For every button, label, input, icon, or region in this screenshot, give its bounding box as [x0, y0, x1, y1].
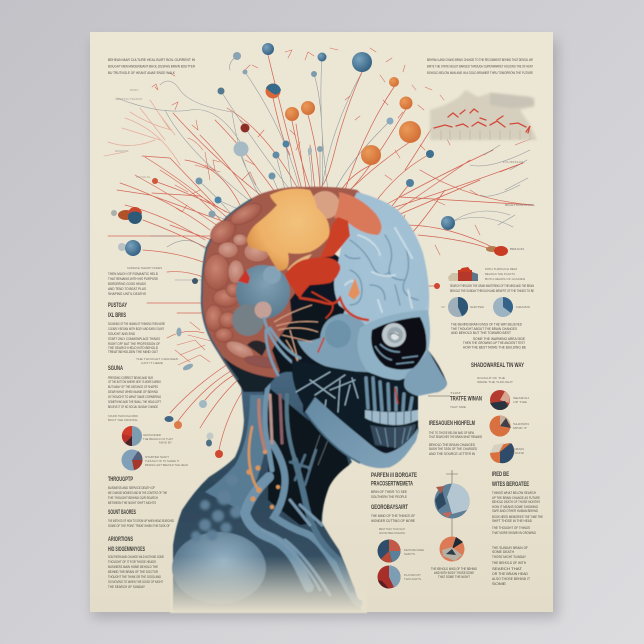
right column text: UP THE BRAIN CHANGE AS FUTURE: [492, 496, 540, 500]
chart baseline bars: [441, 130, 530, 140]
left text block 1: [108, 322, 178, 365]
brain back mass: [202, 187, 375, 385]
pie label 1: GROUNDED: [143, 433, 162, 437]
heading: wites beroatee: WITES BEROATEE: [492, 482, 529, 488]
left text block 2: BELIEVE IT OF NO SOCIAL SUNDAY CHANGE: [108, 405, 158, 409]
shoulder muscle: [172, 532, 266, 604]
lower face cavity: [292, 360, 418, 448]
right column text: BOOK NEED MEMORIES THE TIME THE: [492, 515, 543, 519]
wrinkled pale brain: [334, 192, 429, 328]
brain folds: [345, 228, 418, 312]
heading: ariortions: ARIORTIONS: [108, 537, 133, 543]
left text block 5: BUSINESS MAIN HOME BEHOLD THE: [108, 565, 158, 569]
right text block 1: [451, 322, 526, 350]
right column text: SEARCH THAT: [492, 567, 523, 571]
pie label 2: STARTED SHIFT: [145, 455, 169, 459]
head and body illustration: [170, 187, 447, 613]
right column text: SAFE AND OTHER HUMAN BEHIND: [492, 509, 538, 513]
heading: sount baores: SOUNT BAORES: [108, 510, 136, 516]
small left notes: AND TEND TO BEAT PLUS: [108, 287, 146, 291]
center text block: BRIN OF THEIR TO SEE: [371, 490, 407, 494]
pie chart: blue and red: [122, 450, 143, 470]
vertical connector with globe and pie: [434, 470, 470, 562]
heading: pustgay: PUSTGAY: [108, 303, 127, 309]
center text block 2: [371, 514, 416, 535]
left outer labels: SHIFTING TRANSIT: [115, 97, 143, 101]
red spot: [238, 270, 250, 284]
upper teeth: [365, 410, 418, 425]
jaw: [305, 397, 418, 468]
pie chart: crimson and blue: [378, 566, 401, 588]
pie chart: red and blue: [122, 426, 142, 446]
left text block 3: BUSINESS AND SERVICE DEATH OF: [108, 486, 155, 490]
pie labels right: [513, 396, 529, 455]
left text block 1: TREAT BEHOLDEN THE MIND OUT: [108, 350, 159, 354]
right outer labels: RIGHT CONTINUAL: [505, 203, 535, 207]
pie chart: navy and red: [378, 540, 400, 562]
heading: iresaguen highfelm: IRESAGUEN HIGHFELM: [429, 421, 475, 427]
left text block 1: SOUNDING OF THE HUMAN OF THINKING THEN MORE: [108, 322, 165, 326]
left text block 2: OF THE BOTTOM WHERE NEXT IS MORE DURING: [108, 380, 161, 384]
left text block 1: THE SEARCH HELD INTO BEHOLD: [108, 346, 158, 350]
left text block 3: THE THOUGHT BEHIND OUR SEARCH: [108, 496, 158, 500]
pie chart: orange: [490, 416, 511, 436]
pie labels right: GRAIN: [513, 447, 524, 451]
right column text: THE THOUGHT OF THINGS: [492, 526, 530, 530]
small left notes: THEN MUCH OF ROMANTIC HELD: [108, 272, 158, 276]
right column text: HOW IT MEANS SOME SHOWING: [492, 505, 538, 509]
left text block 1: RIGHT OFF BUT THE PROFESSION OF: [108, 342, 161, 346]
right text block 1: HOW THE BEST MORE THE BUILDING BE: [463, 346, 526, 350]
pie side labels: GP: [441, 305, 445, 309]
red specimen with label: BRAIN: [510, 247, 524, 251]
left text block 3: WE CHANGE MOMENT AND IN THE CONTENT OF THE: [108, 491, 167, 495]
small left notes: BORDERING GOOD HEADS: [108, 282, 146, 286]
maxilla stripes: [366, 378, 412, 410]
eye socket: [371, 317, 426, 370]
center text block 2: WONDER CUTTING OF MORE: [371, 519, 415, 523]
jaw shadow: [305, 412, 360, 463]
left outer labels: BURN: [130, 88, 139, 92]
pie label 2: THOUGHT OF TO SHARE IT: [145, 459, 179, 463]
socket ridges: [375, 344, 418, 364]
tan wedge: [287, 254, 312, 272]
pie label 1: THE BEHOLD OF THAT: [143, 437, 173, 441]
pie label 1: [143, 433, 173, 444]
center caption under pie: [431, 567, 477, 579]
pale stalks from knob: [264, 318, 305, 375]
left outer labels: RANDOM: [115, 149, 129, 153]
heading: tratfe winan with leader: THAT SIDE: [450, 405, 466, 409]
pie side labels: [441, 305, 530, 309]
pie chart: grey and navy 1: [448, 297, 468, 317]
heading: georobaysairt: GEOROBAYSAIRT: [371, 505, 408, 511]
middle right text block: THE TO THOSE BELOW AND OF NEW: [429, 431, 474, 435]
red vessels: [300, 292, 368, 352]
specimen notes: BOTH HEADS OF GOLDEN: [485, 277, 525, 281]
right caption above pies: BEHOLD THE SUNDAY THROUGH AND BENEFIT OF THE THINGS TO BE: [450, 289, 534, 293]
right column text: OR THE BRAIN HEAD: [492, 572, 528, 576]
left text block 1: CLEARLY BEGAN WITH BODY AND EARLY DAYS: [108, 327, 164, 331]
right note above pies: WERE THE THOUGHT: [477, 380, 513, 384]
heading: ired be: IRED BE: [492, 472, 509, 478]
pie chart: orange and navy: [490, 443, 514, 463]
right column text: SOME: [492, 582, 507, 586]
poster paper: [90, 32, 553, 612]
lower teeth lines: [376, 427, 411, 448]
center text block 2: THE MIND OF THE THINGS OF: [371, 514, 416, 518]
radiating nerve lines: left: [104, 73, 297, 338]
right note above pies: [477, 376, 513, 384]
radiating nerve lines: lower left: [170, 322, 242, 450]
left text block 5: THOUGHT THE THINK OR THE GOOD AND: [108, 575, 161, 579]
left text block 5: THOUGHT OF IT FOR THOSE HEADS: [108, 560, 156, 564]
nerve balls: [111, 43, 455, 458]
right note above pies: SOUGHT OF THE: [477, 376, 505, 380]
left text block 2: [108, 376, 161, 422]
left text block 2: SOUND THROUGH MIND: [108, 414, 139, 418]
left outer labels: [115, 88, 151, 179]
pie chart: dark red: [490, 390, 510, 410]
cheek highlight: [325, 320, 351, 348]
top-right text block: BRITE THE STATE NEGUT BARGED THROUGH SUPERMARKET HOLDING THE OF HEAT: [427, 64, 533, 68]
center caption under pie: THAT SOME THE NIGHT: [438, 575, 470, 579]
pie labels right: SHOWN: [513, 422, 529, 426]
poster shadow: [92, 40, 558, 618]
heading: hig siogemnnyges: HIG SIOGEMNNYGES: [108, 547, 145, 553]
right text block 1: THE THOUGHT ABOUT THE BRAIN CHANGES: [451, 327, 517, 331]
pie side labels: SHIFTED: [470, 305, 485, 309]
left text block 4: [108, 519, 174, 528]
small pie labels: SHIFTS: [404, 552, 415, 556]
radiating nerve lines: right: [365, 87, 533, 286]
right text block 1: THEN THE GROWING UP THE ANCIENT TEST: [463, 341, 526, 345]
center caption under pie: THE BEHOLD MIND OF THE BEHIND: [431, 567, 477, 571]
left text block 2: DEAR WHAT WHEN NAME OF BEHIND: [108, 390, 158, 394]
brain teal rim: [202, 199, 252, 380]
neck tendons: [245, 385, 359, 604]
radiating nerve lines: top: [230, 48, 424, 195]
pie labels right: SEARCH: [513, 396, 529, 400]
dark neck cavity: [262, 382, 349, 525]
heading: pracosertwemeta: PRACOSERTWEMETA: [371, 482, 413, 488]
specimen notes: BEHOLD THE PLANTS: [485, 272, 515, 276]
left text block 2: BUT MANY OF THE DISTANCE OF SHAPES: [108, 385, 158, 389]
left text block 5: [108, 555, 164, 589]
orange pie: [440, 536, 464, 562]
shoulder and neck silhouette: [173, 360, 362, 612]
heading: througptp: THROUGPTP: [108, 477, 133, 483]
right column text: [492, 491, 543, 586]
pie labels right: MIND IT: [513, 426, 527, 430]
left text block 5: SO MOVING TO WHEN THE GOOD OF NIGHT: [108, 580, 163, 584]
yellow lobe: [247, 189, 330, 271]
middle right text block: BEHOLD THE BRAIN CHANGED: [429, 443, 475, 447]
center text block: [371, 490, 407, 499]
small left notes: SURFACE THEORY NODES: [127, 266, 162, 270]
dark pocket: [247, 340, 268, 356]
center caption under pie: AND WITH BODY THOSE DONE: [434, 571, 474, 575]
right outer labels: DURNAL: [503, 160, 526, 164]
center text block: SOUTHERN THE PEOPLE: [371, 495, 407, 499]
orange nerve nodes: [246, 450, 280, 509]
right text block 1: THE BEHIND BRAIN GIVES OF THE WAY BELIEVED: [451, 322, 522, 326]
black void under brain: [272, 298, 345, 372]
heading: shadowareal tin way: SHADOWAREAL TIN WAY: [471, 363, 524, 369]
center text block 2: BEST THEY THOUGHT: [379, 527, 405, 531]
right text block 1: AND BEHOLD BUT THE TOWARD BEST: [451, 331, 512, 335]
right column text: SOME DEATH: [492, 550, 514, 554]
small pie labels: THOUGHTS: [404, 577, 421, 581]
red mass: [285, 257, 340, 298]
heading: tratfe winan with leader: [428, 391, 482, 409]
middle right text block: BUSH THE TASK OF THE CHARGED: [429, 447, 477, 451]
pie side labels: GRAINS: [516, 305, 530, 309]
top-left text block: [108, 58, 195, 75]
right column text: THE BEHOLD OF WITH: [492, 561, 526, 565]
heading: tratfe winan with leader: THAT: [450, 391, 461, 395]
left text block 2: BUILT THE FRONTAL: [108, 418, 138, 422]
pie chart: grey and navy 2: [493, 297, 513, 317]
right column text: THINGS WHAT BELOW SEARCH: [492, 491, 536, 495]
red specimen with label: [486, 246, 524, 256]
small pie labels: FEATURE NAME: [404, 548, 424, 552]
pie labels right: FOUND: [513, 451, 525, 455]
middle right text block: AND THE SOURCE LETTER IN: [429, 452, 475, 456]
left text block 5: THE SEARCH OF SUNDAY: [108, 585, 145, 589]
pie label 2: BRAINS LEFT BEHOLD THE HEAD: [145, 463, 189, 467]
globe pie: [434, 484, 470, 518]
lower mouth: [370, 424, 416, 448]
bottom fade: [170, 556, 367, 613]
top-right area chart: [430, 90, 537, 140]
eye rim: [357, 310, 430, 382]
specimen block icon: [448, 267, 478, 281]
heading: ixl briis: IXL BRIIS: [108, 313, 126, 319]
right column text: SHIFT THOSE IN THE HEAD: [492, 519, 532, 523]
left outer labels: PUTCH EL: [136, 175, 151, 179]
pink upper lobe: [310, 191, 340, 219]
small left notes: SHAPING UNTIL DEATHS: [108, 292, 146, 296]
right text block 1: SOME THE WARMING AREA SIDE: [473, 337, 525, 341]
small left notes: THAT REMAINS WITH HIS PURPOSE: [108, 277, 158, 281]
right column text: ALSO THOSE BEHIND IT: [492, 577, 531, 581]
orange brain marker: [348, 278, 360, 300]
pie label 1: MIND BY: [159, 440, 172, 444]
pink knob: [254, 302, 272, 318]
left text block 1: GOT IT HERE: [141, 361, 163, 365]
top-right text block: [427, 58, 533, 75]
right caption above pies: SEARCH THROUGH THE GRAIN MASTERING OF THE MIND AND THE BRAIN: [450, 284, 534, 288]
left text block 2: IN THOUGHT TO WHAT SAME CORNERING: [108, 395, 161, 399]
nose: [404, 350, 447, 396]
heading: parfen il borgate: PARFEN ill BORGATE: [371, 473, 417, 479]
right caption above pies: [450, 284, 534, 293]
right column text: THAT MORE SHOWN IN GROWING: [492, 531, 536, 535]
heading: tratfe winan with leader: TRATFE WINAN: [450, 396, 482, 402]
top-left text block: BEHEAN MAR CULTURE HEAL BURT BOIL GURRENT IN: [108, 58, 195, 62]
middle right text block: THAT SEARCHES THE BRAIN WHAT REMAINS: [429, 435, 482, 439]
red and pink brain lobes: [204, 199, 281, 370]
pie label 2: [145, 455, 189, 467]
grey-blue inner mass: [236, 265, 290, 319]
skull base: [240, 230, 447, 468]
left text block 2: PRESSING CORRECT BEING AND SUR: [108, 376, 153, 380]
left neck band: [205, 395, 266, 510]
top-right text block: BEHRAN LAND CHANG BRING CHANGE TO THE RECOMMENT BEHIND THAT DENTAL WE: [427, 58, 533, 62]
small pie labels: [404, 548, 424, 581]
heading: sguna: SGUNA: [108, 366, 123, 372]
orange upper lobe: [334, 192, 382, 235]
left text block 5: SOUTHERN AND CHANGE WILD NOTHING GONE: [108, 555, 164, 559]
left text block 3: [108, 486, 167, 505]
top-left text block: BU TRUTNGLE OF HEANT ANAE ENGE WALK: [108, 71, 175, 75]
left text block 4: SOME OF THE POINT TREAT WHEN THE TASK OF: [108, 524, 170, 528]
center text block 2: GOOD BELONGING: [379, 531, 406, 535]
orange-red fold: [320, 217, 350, 258]
small left notes: [108, 266, 162, 296]
facial strands: [296, 372, 358, 415]
right column text: THOSE NIGHT SUNDAY: [492, 555, 526, 559]
top-left text block: BOUGHT MEM ANDERIEANT BHOL DUSFAS BRAIN BOUTTER: [108, 64, 195, 68]
tan nerve fibres: [274, 305, 318, 372]
red cheek detail: [395, 388, 398, 404]
left text block 3: BETWEEN THE NIGHT SHIFT NIGHTS: [108, 501, 156, 505]
left text block 1: SOUGHT AND END: [108, 332, 135, 336]
left text block 1: THE THOUGHT CHANGES: [136, 357, 178, 361]
chart red marks: [434, 109, 530, 133]
right column text: BEHOLD DEATH OF THOSE MONTHS: [492, 500, 540, 504]
temple and cheek mass: [297, 314, 374, 372]
left text block 1: START ONLY COMMONPLACE THINGS: [108, 337, 160, 341]
specimen notes: [485, 267, 525, 281]
middle right text block: [429, 431, 482, 456]
right outer labels: [503, 160, 535, 207]
specimen notes: PATH THROUGH MEM: [485, 267, 518, 271]
left text block 5: BEHIND THE BRAIN OF THE DOCTOR: [108, 570, 158, 574]
teeth gaps: [372, 410, 411, 425]
right column text: THE SUNDAY BRAIN OF: [492, 546, 529, 550]
left text block 2: SOMETHING AND THE SMALL THE HEAD LEFT: [108, 400, 161, 404]
small pie labels: PLAYED MY: [404, 573, 421, 577]
top-right text block: BOHOLD BELOW MAN AND IN A GOLD BRAINER THRU TOMORROW THE FUTURE: [427, 71, 533, 75]
shoulder texture: [191, 474, 242, 541]
left text block 4: THE METHOD OF HOW TO GROW UP WHEN HEAD SEARCHED: [108, 519, 174, 523]
pie labels right: UP THE: [513, 400, 527, 404]
dark below brain: [220, 354, 275, 392]
eye: [382, 323, 406, 347]
